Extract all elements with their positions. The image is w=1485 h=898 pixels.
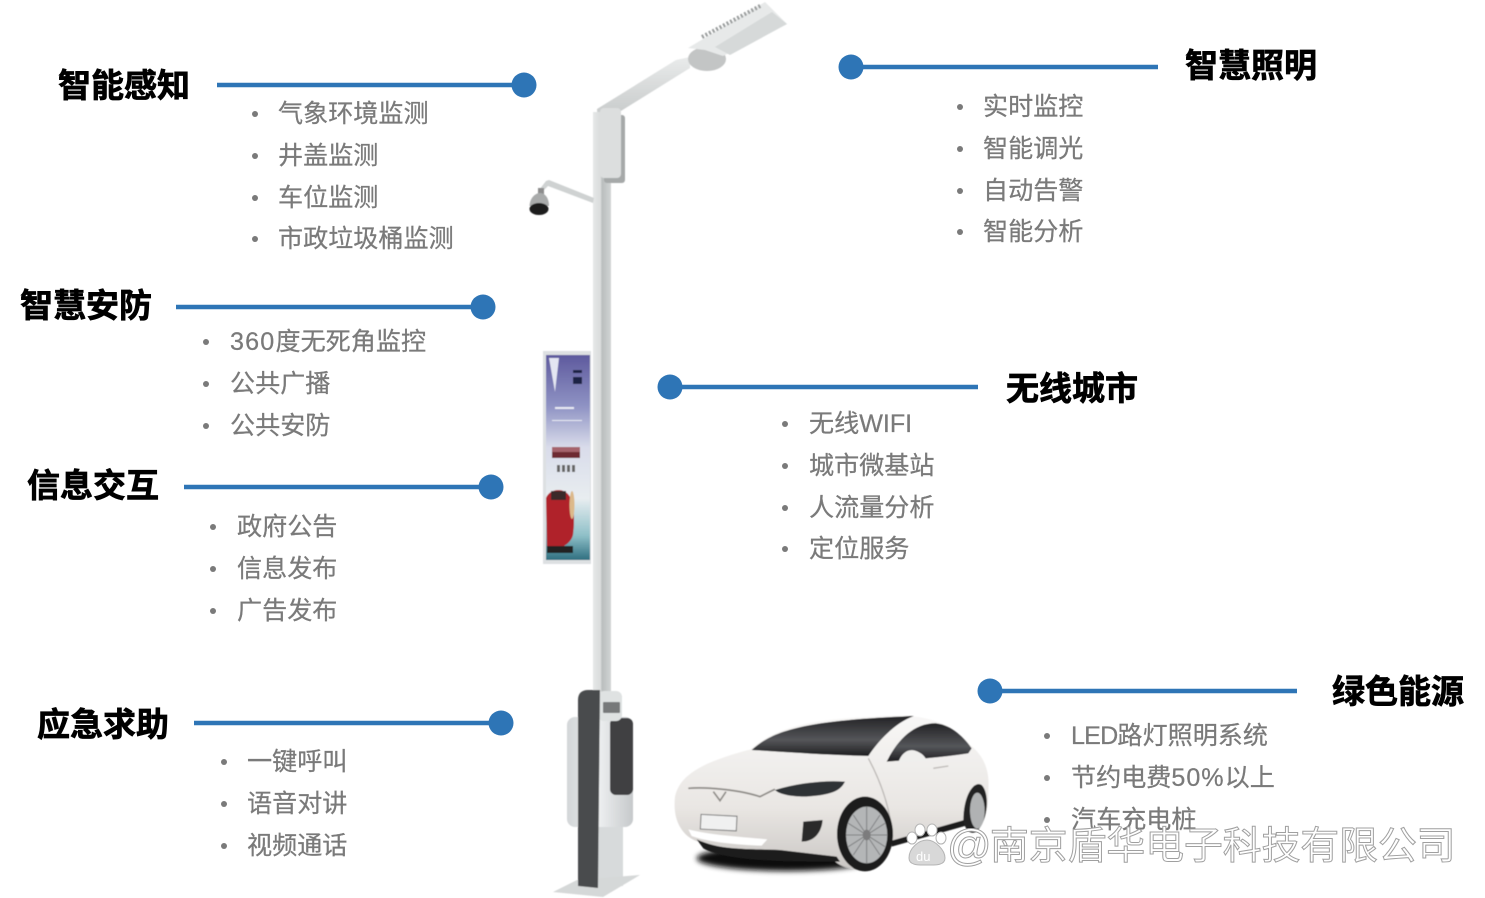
heading: 智慧照明 — [1185, 47, 1317, 84]
list: 智能调光 — [983, 135, 1083, 163]
list: 语音对讲 — [247, 790, 347, 818]
list: 360度无死角监控 — [230, 328, 426, 356]
connector — [978, 678, 1297, 704]
heading: 智能感知 — [58, 67, 190, 104]
list — [210, 513, 337, 625]
car door lines — [868, 758, 948, 837]
car lower bumper — [697, 839, 840, 862]
list — [252, 100, 454, 253]
rear wheel — [963, 784, 987, 833]
LED lamp head — [688, 2, 787, 71]
heading: 应急求助 — [37, 706, 169, 743]
connector — [838, 54, 1158, 80]
lamp arm — [597, 57, 690, 122]
heading: 智慧安防 — [20, 287, 152, 324]
heading: 绿色能源 — [1332, 673, 1464, 710]
list: 人流量分析 — [809, 494, 934, 522]
list: 公共安防 — [230, 412, 330, 440]
list: LED路灯照明系统 — [1071, 722, 1268, 750]
connector — [658, 374, 978, 400]
car side sill — [892, 820, 968, 847]
list: 一键呼叫 — [247, 748, 347, 776]
list: 信息发布 — [237, 555, 337, 583]
panel: 绿色能源 — [978, 673, 1464, 834]
list: 无线WIFI — [809, 410, 912, 438]
connector — [176, 294, 496, 320]
car mirror — [898, 750, 927, 762]
list: 车位监测 — [278, 184, 378, 212]
icon: Baidu paw — [907, 824, 946, 865]
list: 视频通话 — [247, 832, 347, 860]
list: 政府公告 — [237, 513, 337, 541]
car hood crease and logo — [688, 788, 775, 801]
list — [203, 328, 426, 440]
list: 气象环境监测 — [278, 100, 429, 128]
list: 城市微基站 — [809, 452, 934, 480]
watermark text: @ — [947, 821, 992, 870]
base cabinet with charging post — [553, 690, 640, 897]
car ground shadow — [697, 846, 877, 871]
pole-mounted equipment box — [600, 108, 625, 183]
connector — [184, 474, 504, 500]
connector — [217, 72, 536, 98]
list: 汽车充电桩 — [1071, 806, 1196, 834]
panel: 应急求助 — [37, 706, 514, 860]
panel: 智能感知 — [58, 67, 536, 253]
panel: 信息交互 — [27, 467, 504, 625]
heading: 信息交互 — [27, 467, 159, 504]
list: 市政垃圾桶监测 — [278, 225, 454, 253]
list: 公共广播 — [230, 370, 330, 398]
list: 广告发布 — [237, 597, 337, 625]
list — [957, 93, 1083, 246]
car side windows — [887, 723, 972, 762]
illustration: smart street lamp pole — [530, 2, 787, 897]
car windshield — [752, 716, 914, 756]
list — [1044, 722, 1275, 834]
watermark: Baidu source credit — [907, 821, 1456, 870]
list: 智能分析 — [983, 218, 1083, 246]
connector — [194, 710, 514, 736]
icon: Baidu paw: du — [916, 849, 930, 864]
car fog lamp — [802, 820, 823, 842]
car headlight — [775, 781, 845, 797]
main pole — [593, 112, 611, 692]
car number plate — [700, 814, 737, 831]
heading: 无线城市 — [1006, 370, 1138, 407]
illustration: white electric SUV — [675, 716, 989, 871]
list: 定位服务 — [809, 535, 909, 563]
panel: 智慧安防 — [20, 287, 496, 440]
watermark text: 南京盾华电子科技有限公司 — [990, 825, 1456, 868]
list — [221, 748, 347, 860]
front wheel — [837, 797, 893, 871]
list: 实时监控 — [983, 93, 1083, 121]
advertising banner — [543, 351, 591, 564]
list — [782, 410, 934, 563]
list: 井盖监测 — [278, 142, 378, 170]
car body — [675, 716, 989, 868]
panel: 无线城市 — [658, 370, 1138, 563]
list: 自动告警 — [983, 177, 1083, 205]
camera arm and dome — [530, 180, 594, 215]
panel: 智慧照明 — [838, 47, 1317, 246]
car daytime light — [688, 829, 767, 846]
list: 节约电费50%以上 — [1071, 764, 1275, 792]
